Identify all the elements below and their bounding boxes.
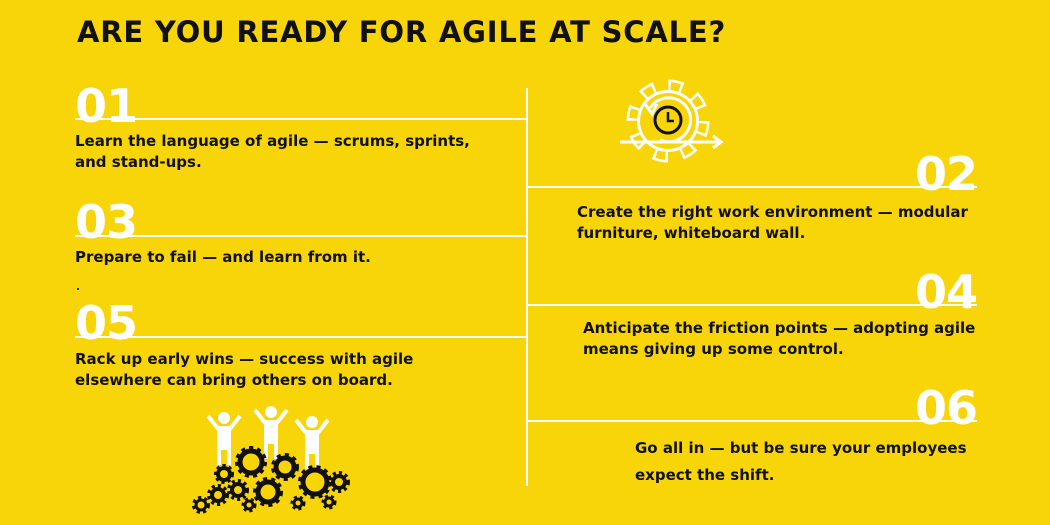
item 05: Rack up early wins — success with agile [75, 350, 413, 368]
item 02: Create the right work environment — modular [577, 203, 968, 221]
item 01 [75, 79, 526, 171]
item 04: 04 [915, 265, 977, 319]
title: ARE YOU READY FOR AGILE AT SCALE? [77, 15, 726, 49]
item 01: and stand-ups. [75, 153, 202, 171]
item 01: Learn the language of agile — scrums, sprints, [75, 132, 470, 150]
item 03: 03 [75, 195, 137, 249]
vertical divider [526, 88, 528, 486]
icon: gear with clock [620, 80, 724, 162]
item 05: 05 [75, 296, 137, 350]
item 04: Anticipate the friction points — adopting agile [583, 319, 975, 337]
item 01: 01 [75, 79, 137, 133]
item 05 [75, 296, 526, 389]
item 04: means giving up some control. [583, 340, 844, 358]
item 04 [528, 265, 977, 358]
item 06: expect the shift. [635, 466, 774, 484]
item 02: 02 [915, 147, 977, 201]
item 06: 06 [915, 381, 977, 435]
item 02: furniture, whiteboard wall. [577, 224, 805, 242]
item 03 [75, 195, 526, 266]
item 05: elsewhere can bring others on board. [75, 371, 393, 389]
icon: people on gears [192, 406, 350, 514]
item 06: Go all in — but be sure your employees [635, 439, 966, 457]
item 02 [528, 147, 977, 242]
item 03: Prepare to fail — and learn from it. [75, 248, 371, 266]
item 06 [528, 381, 977, 484]
